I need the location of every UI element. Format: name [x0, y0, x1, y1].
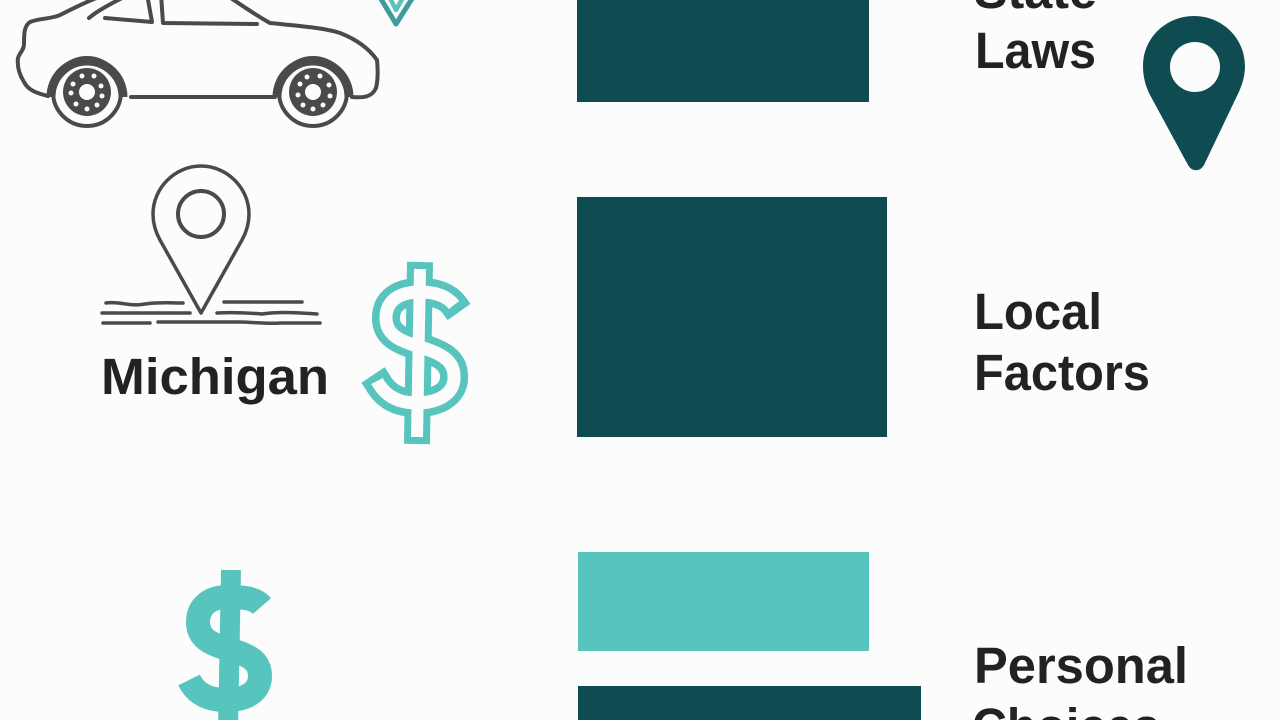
label: State Laws [974, 0, 1097, 79]
label: Local Factors: Local [974, 283, 1102, 340]
icon: solid dollar sign [189, 570, 262, 720]
label: Local Factors: Factors [974, 344, 1150, 401]
icon: outlined map pin on lines [102, 166, 320, 323]
icon: outlined dollar sign [373, 262, 459, 444]
label: State Laws: Laws [975, 22, 1096, 79]
icon: dark location pin [1143, 16, 1245, 170]
icon: car outline [18, 0, 378, 126]
icon: teal outlined pin tip [378, 0, 415, 24]
bar: local factors [577, 197, 887, 437]
icon: left wheel [51, 58, 123, 126]
bar: state laws [577, 0, 869, 102]
bar: personal choices dark [578, 686, 921, 720]
label: Local Factors [974, 283, 1150, 401]
bar: personal choices light [578, 552, 869, 651]
label: Personal Choices: Personal [974, 637, 1188, 694]
icon: right wheel [277, 58, 349, 126]
label: Personal Choices [972, 637, 1188, 720]
label: Michigan: Michigan [101, 348, 329, 405]
